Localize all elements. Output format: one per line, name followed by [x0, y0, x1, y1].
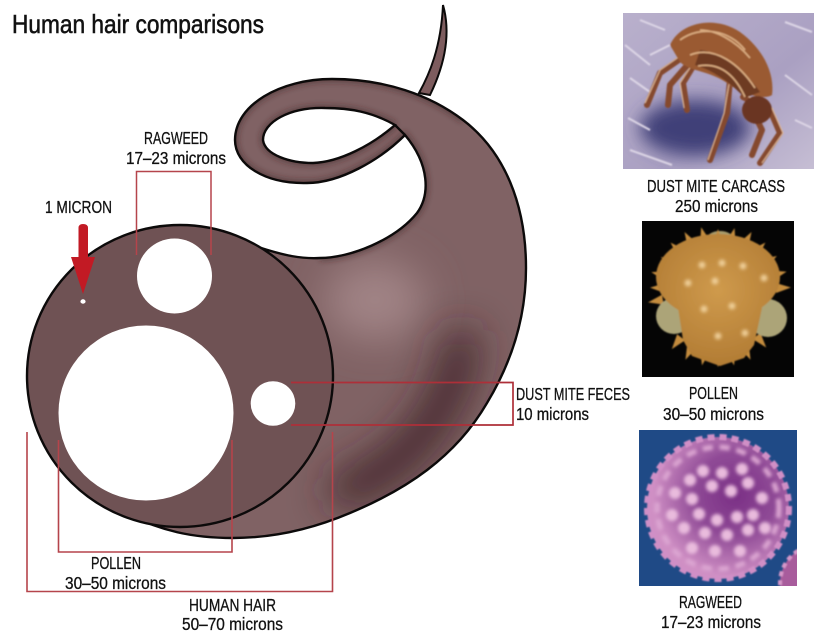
label: ragweed — [126, 128, 226, 168]
hair cross-section circle — [27, 225, 333, 527]
label: ragweed: RAGWEED — [144, 128, 208, 148]
dark shadow under the mite — [640, 100, 750, 156]
label: 1 micron: 1 MICRON — [45, 197, 112, 217]
dust mite feces hole — [251, 381, 295, 426]
ragweed hole — [137, 238, 212, 314]
caption: ragweed: RAGWEED — [679, 592, 742, 612]
label: human hair: 50–70 microns — [182, 614, 283, 634]
mite body — [670, 23, 772, 97]
hair tail tip — [419, 5, 447, 95]
ragweed ridges — [657, 447, 779, 569]
label: dust mite feces: DUST MITE FECES — [516, 384, 630, 404]
title: Human hair comparisons — [12, 9, 264, 39]
panel: dust mite photo — [623, 13, 814, 169]
upper lobe — [656, 234, 780, 320]
pollen hole — [58, 326, 234, 500]
dust mite feces bracket — [291, 382, 513, 425]
label: dust mite feces: 10 microns — [516, 404, 589, 424]
caption: ragweed: 17–23 microns — [661, 612, 761, 632]
spine highlights — [685, 280, 691, 286]
hair body shading — [235, 79, 463, 490]
upper lobe spikes — [647, 226, 791, 367]
label: pollen — [65, 553, 166, 593]
lower lobe — [678, 307, 762, 367]
top bud — [708, 230, 732, 236]
label: dust mite feces — [516, 384, 630, 424]
caption: dust mite carcass: DUST MITE CARCASS — [647, 176, 785, 196]
caption: pollen: 30–50 microns — [663, 404, 764, 424]
label: human hair: HUMAN HAIR — [189, 595, 276, 615]
hair outline — [120, 79, 526, 538]
mite legs — [647, 57, 780, 163]
ragweed grain — [647, 437, 789, 579]
one micron dot — [80, 299, 86, 304]
panel: ragweed photo — [639, 430, 797, 586]
human hair bracket — [27, 432, 332, 592]
neighbouring grain — [777, 548, 797, 586]
panel: pollen photo — [642, 221, 794, 377]
pollen bracket — [58, 440, 232, 552]
hair body and loop — [120, 79, 526, 538]
caption: pollen — [663, 383, 764, 424]
caption: ragweed — [661, 592, 761, 632]
icon: red arrow pointing at 1 micron dot — [71, 224, 95, 294]
label: ragweed: 17–23 microns — [126, 148, 226, 168]
label: pollen: 30–50 microns — [65, 573, 166, 593]
caption: dust mite carcass: 250 microns — [675, 196, 758, 216]
illustration: hair strand with cross-section — [27, 5, 526, 538]
ragweed bracket — [136, 172, 211, 255]
side spheres — [655, 300, 683, 335]
surface streaks — [625, 20, 812, 165]
caption: dust mite carcass — [647, 176, 785, 216]
label: pollen: POLLEN — [91, 553, 141, 573]
label: human hair — [182, 595, 283, 634]
caption: pollen: POLLEN — [689, 383, 738, 403]
ragweed bumps — [666, 463, 771, 557]
